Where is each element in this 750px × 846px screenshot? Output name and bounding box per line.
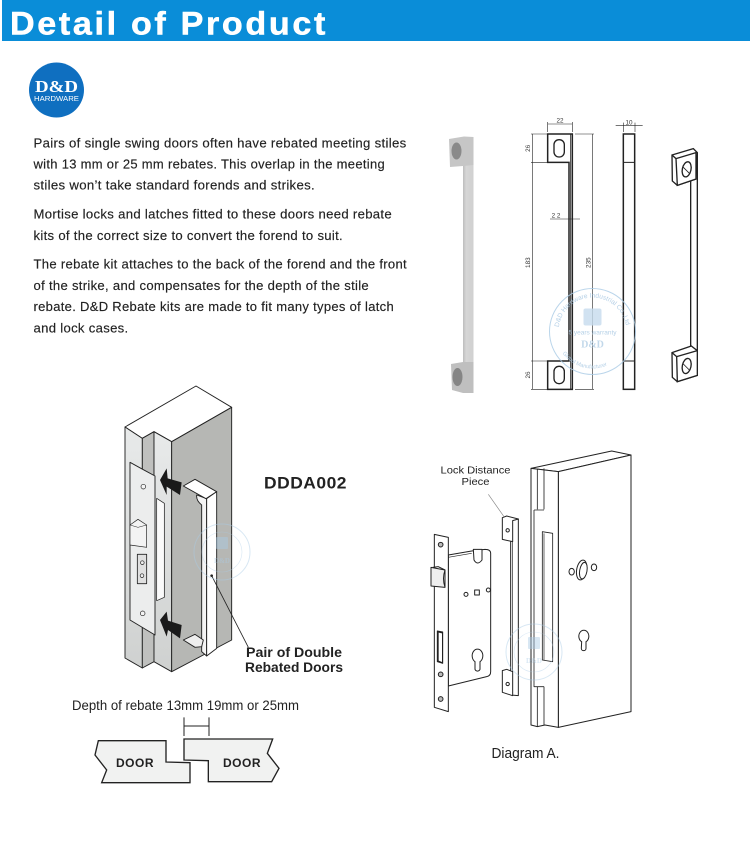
- body text: of the strike, and compensates for the depth of the stile: [34, 278, 369, 293]
- watermark stamp: diagram A: D&D: [526, 657, 542, 665]
- side view of handle: [623, 134, 635, 389]
- forend: [431, 534, 448, 712]
- dimension labels: 22: [556, 117, 564, 124]
- lock distance piece label: Piece: [462, 476, 490, 488]
- latch bolt: [130, 519, 147, 547]
- arrow: top: [160, 468, 182, 495]
- front view of handle: [548, 134, 572, 389]
- body text: [32, 135, 407, 335]
- door labels: [116, 756, 261, 770]
- strike cut-out: [137, 554, 147, 584]
- body text: stiles won’t take standard forends and strikes.: [34, 178, 315, 192]
- door illustration caption: Pair of Double: [246, 645, 343, 660]
- arrow: bottom: [160, 612, 182, 638]
- rebate kit bracket: [183, 479, 217, 656]
- right door face: [172, 407, 232, 672]
- rebate depth heading: Depth of rebate 13mm 19mm or 25mm: [72, 698, 299, 713]
- dimension labels: 235: [586, 257, 593, 268]
- rebate section diagram: [95, 717, 279, 783]
- leader line: [488, 494, 504, 517]
- body text: Pairs of single swing doors often have rebated meeting stiles: [34, 135, 407, 150]
- dimension labels: 26: [525, 144, 532, 152]
- left door section: [95, 741, 190, 783]
- body text: Mortise locks and latches fitted to these doors need rebate: [34, 206, 392, 222]
- technical drawing: front and side elevation with dimensions: [525, 117, 697, 389]
- left door side: [125, 427, 142, 668]
- door body: [531, 451, 631, 727]
- lock distance piece: [502, 516, 518, 696]
- watermark stamp: top right: Global Manufacturer: [563, 352, 606, 369]
- forend plate: [130, 462, 155, 635]
- watermark stamp: door illustration: [194, 524, 250, 580]
- watermark stamp: door illustration: D&D: [214, 557, 230, 565]
- body text: kits of the correct size to convert the forend to suit.: [34, 228, 343, 243]
- body text: and lock cases.: [34, 320, 128, 335]
- door top face: [125, 386, 232, 442]
- rebate recess: [142, 432, 154, 668]
- door illustration caption: [245, 645, 343, 675]
- leader line: [210, 574, 248, 647]
- product photo: pull handle: [449, 136, 474, 393]
- lock distance piece label: [440, 464, 511, 488]
- logo: D&D Hardware: [29, 62, 84, 118]
- dimension labels: 183: [525, 257, 532, 268]
- watermark stamp: top right: [549, 288, 636, 375]
- dimension labels: 2 2: [552, 213, 561, 220]
- diagram A caption: Diagram A.: [492, 746, 560, 762]
- diagram A: mortise lock exploded view: [431, 451, 631, 727]
- depth dimension: [184, 717, 209, 736]
- right door section: [184, 739, 279, 782]
- forend recess: [157, 498, 164, 601]
- logo: D&D Hardware: D&D: [35, 77, 78, 96]
- product code: DDDA002: [264, 474, 347, 492]
- watermark stamp: diagram A: [506, 624, 562, 680]
- header banner: [2, 0, 750, 42]
- door illustration caption: Rebated Doors: [245, 660, 343, 675]
- door labels: DOOR: [223, 756, 261, 770]
- dimension labels: [525, 117, 633, 379]
- watermark stamp: top right: 5 years warranty: [568, 330, 617, 336]
- watermark stamp: top right: D&D: [581, 340, 604, 350]
- body text: with 13 mm or 25 mm rebates. This overlap in the meeting: [32, 157, 385, 172]
- watermark stamp: top right: D&D Hardware Industrial Co.,Ltd: [554, 293, 630, 327]
- dimension labels: 10: [625, 120, 633, 127]
- door illustration: pair of double rebated doors: [125, 386, 248, 672]
- title: Detail of Product: [10, 6, 328, 42]
- isometric view of handle: [672, 149, 697, 382]
- lock distance piece label: Lock Distance: [440, 464, 511, 476]
- right door side: [154, 432, 172, 672]
- logo: D&D Hardware: HARDWARE: [34, 94, 79, 103]
- door labels: DOOR: [116, 756, 154, 770]
- lock case: [448, 549, 491, 686]
- body text: rebate. D&D Rebate kits are made to fit many types of latch: [34, 299, 394, 314]
- body text: The rebate kit attaches to the back of the forend and the front: [34, 256, 407, 271]
- dimension lines: [531, 122, 643, 389]
- dimension labels: 26: [525, 371, 532, 379]
